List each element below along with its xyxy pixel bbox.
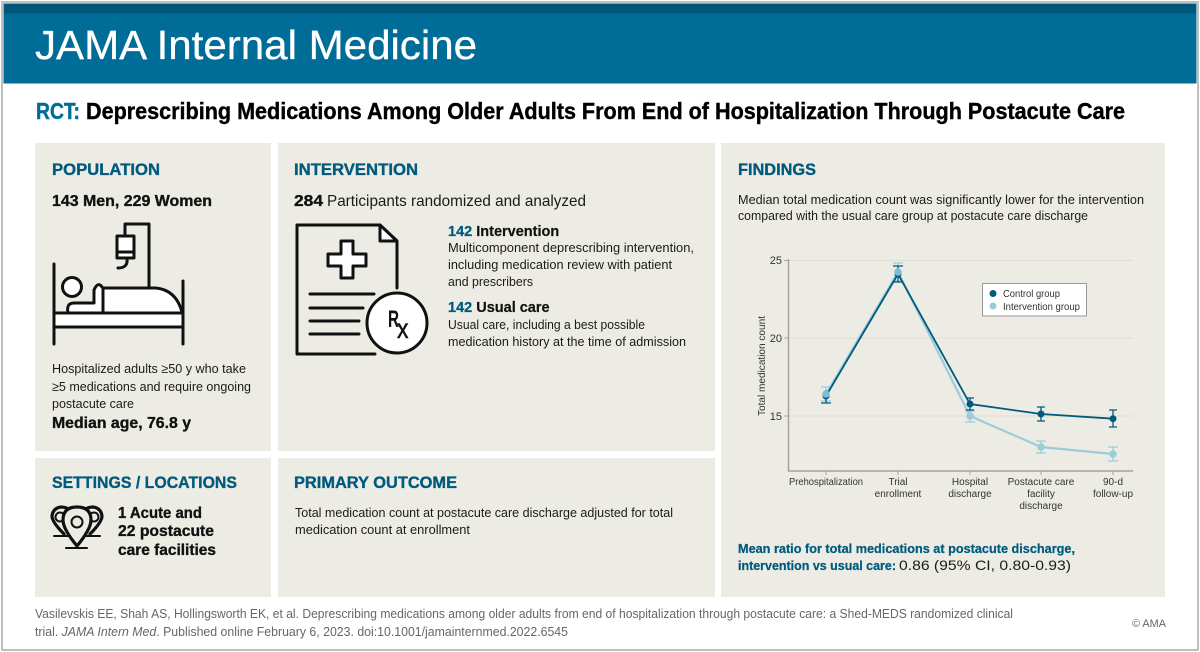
x axis labels: discharge: [1019, 501, 1063, 512]
settings text: 1 Acute and: [118, 505, 202, 522]
x axis labels: follow-up: [1093, 489, 1133, 500]
usual care arm: Usual care, including a best possible: [448, 317, 645, 332]
primary outcome text: Total medication count at postacute care discharge adjusted for total: [295, 505, 673, 520]
settings heading: SETTINGS / LOCATIONS: [52, 474, 237, 492]
icon: patient in hospital bed: [54, 224, 183, 344]
x axis labels: Prehospitalization: [789, 477, 863, 488]
intervention arm: Multicomponent deprescribing intervention,: [448, 240, 694, 255]
citation footer: [35, 607, 1013, 639]
y axis labels: 15: [770, 411, 782, 423]
icon: prescription document: [297, 225, 427, 354]
primary outcome text: [295, 505, 673, 537]
x axis labels: discharge: [948, 489, 992, 500]
x axis labels: [789, 477, 1133, 512]
findings summary: [738, 192, 1144, 223]
icon: prescription document: R: [388, 306, 399, 333]
settings text: 22 postacute: [118, 523, 214, 540]
population heading: POPULATION: [52, 161, 160, 179]
chart legend: Intervention group: [1003, 302, 1080, 313]
x axis labels: Hospital: [952, 477, 988, 488]
x axis labels: Trial: [888, 477, 908, 488]
y axis labels: Total medication count: [757, 316, 768, 416]
citation footer: trial. JAMA Intern Med. Published online February 6, 2023. doi:10.1001/jamainternmed.2022.6545: [35, 625, 568, 639]
mean ratio result: Mean ratio for total medications at postacute discharge,: [738, 541, 1075, 556]
intervention arm: [448, 224, 694, 289]
panel: settings and locations: [35, 458, 271, 597]
usual care arm: 142 Usual care: [448, 300, 550, 316]
y axis labels: [757, 255, 782, 423]
x axis labels: facility: [1027, 489, 1055, 500]
mean ratio result: intervention vs usual care:: [738, 558, 896, 573]
participant counts: 143 Men, 229 Women: [52, 193, 212, 210]
intervention arm: 142 Intervention: [448, 224, 559, 240]
findings heading: FINDINGS: [738, 161, 816, 179]
randomization count: Participants randomized and analyzed: [327, 193, 586, 210]
intervention arm: including medication review with patient: [448, 257, 672, 272]
icon: prescription document: x: [397, 313, 408, 344]
main heading: Deprescribing Medications Among Older Adults From End of Hospitalization Through Postacute Care: [86, 98, 1125, 124]
population description: Hospitalized adults ≥50 y who take: [52, 361, 246, 376]
header banner: [4, 4, 1196, 84]
citation footer: Vasilevskis EE, Shah AS, Hollingsworth EK, et al. Deprescribing medications among older adults from end of hospitalization through postacute care: a Shed-MEDS randomized clinical: [35, 607, 1013, 621]
intervention group series: [821, 263, 1118, 461]
primary outcome heading: PRIMARY OUTCOME: [294, 474, 457, 492]
main heading: RCT:: [36, 98, 80, 124]
settings text: care facilities: [118, 542, 216, 559]
chart legend: [982, 284, 1086, 316]
overlapping intervention markers: [822, 268, 902, 398]
settings text: [118, 505, 216, 559]
panel: intervention: [278, 143, 715, 451]
panel: population: [35, 143, 271, 451]
chart legend: Control group: [1003, 289, 1060, 300]
usual care arm: [448, 300, 686, 349]
icon: location pins: [52, 507, 102, 548]
findings summary: Median total medication count was significantly lower for the intervention: [738, 192, 1144, 207]
panel: primary outcome: [278, 458, 715, 597]
intervention heading: INTERVENTION: [294, 161, 418, 179]
population description: ≥5 medications and require ongoing: [52, 379, 251, 394]
line chart: total medication count: [757, 255, 1133, 512]
population description: postacute care: [52, 396, 134, 411]
journal title: JAMA Internal Medicine: [35, 22, 477, 68]
control group series: [821, 266, 1117, 427]
x axis labels: 90-d: [1103, 477, 1123, 488]
copyright: © AMA: [1132, 618, 1167, 630]
mean ratio result: [738, 541, 1075, 573]
population description: [52, 361, 251, 411]
y axis labels: 20: [770, 333, 782, 345]
findings summary: compared with the usual care group at postacute care discharge: [738, 208, 1088, 223]
intervention arm: and prescribers: [448, 274, 533, 289]
panel: findings: [721, 143, 1165, 597]
mean ratio result: 0.86 (95% CI, 0.80-0.93): [899, 557, 1071, 573]
x axis labels: enrollment: [875, 489, 922, 500]
randomization count: 284: [294, 193, 323, 210]
median age: Median age, 76.8 y: [52, 415, 191, 432]
usual care arm: medication history at the time of admission: [448, 334, 686, 349]
y axis labels: 25: [770, 255, 782, 267]
x axis labels: Postacute care: [1008, 477, 1075, 488]
primary outcome text: medication count at enrollment: [295, 522, 470, 537]
